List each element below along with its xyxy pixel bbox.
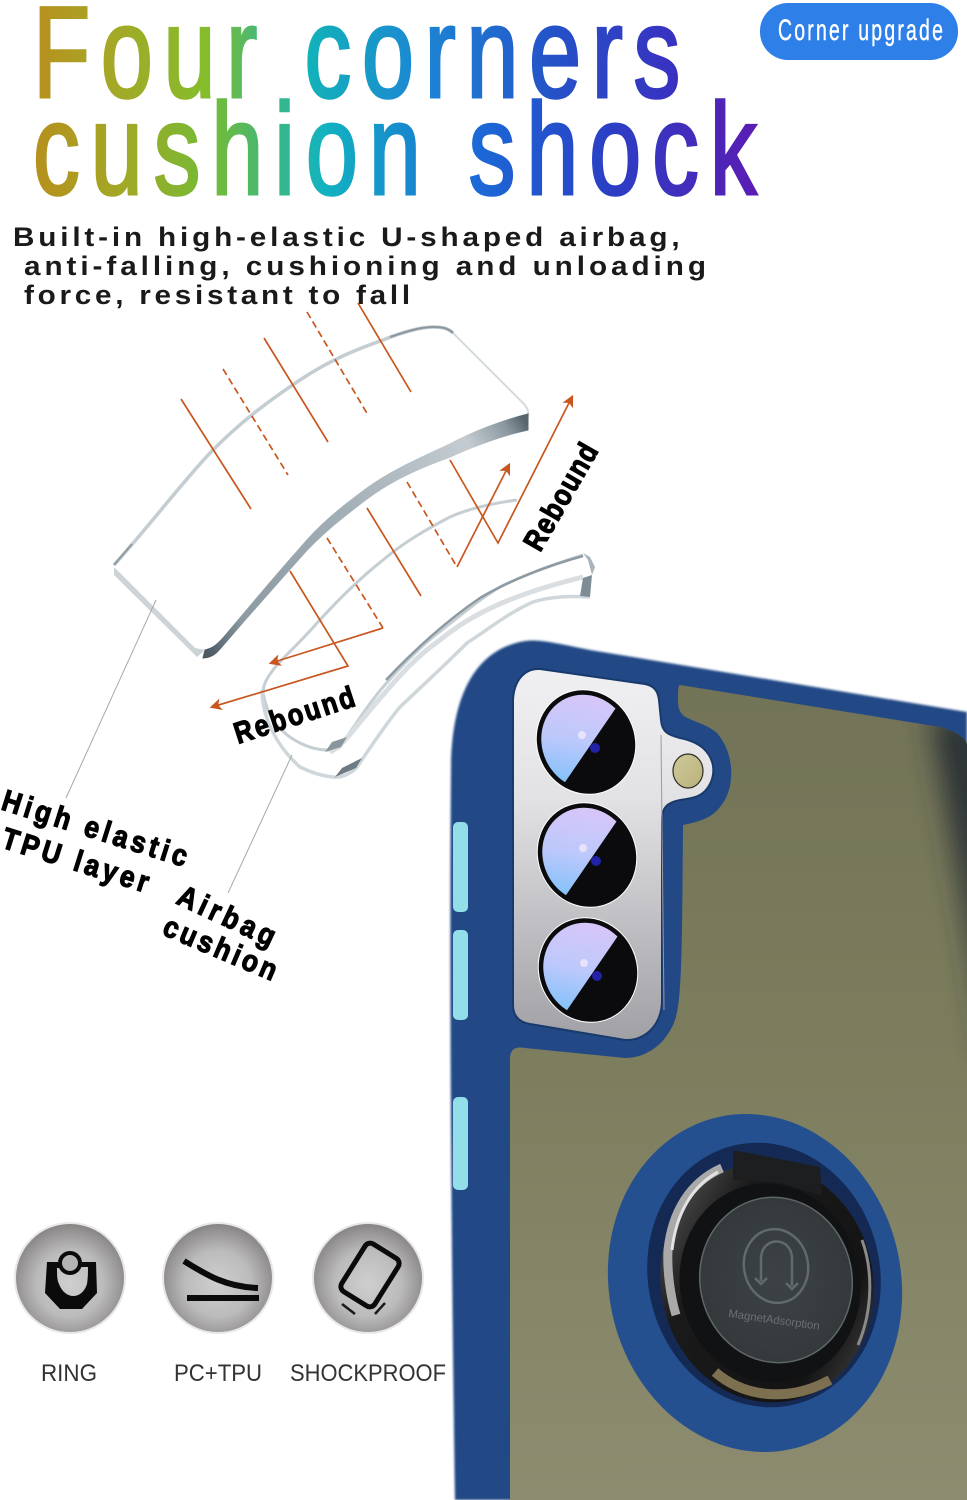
camera lens 1 [536,689,636,795]
airbag cushion U-shaped layer [260,500,595,777]
camera lens 2 [536,802,638,908]
side buttons [453,822,468,1190]
camera lens 3 [538,917,638,1023]
badge: Corner upgrade [760,3,958,60]
icon: PC+TPU [163,1223,273,1333]
caption: RING: RING [41,1360,97,1387]
description text: force, resistant to fall [24,280,410,311]
island seam line [661,735,664,1010]
flash [673,754,703,788]
icon: ring [15,1223,125,1333]
caption: SHOCKPROOF: SHOCKPROOF [290,1360,446,1387]
label: Airbag cushion: Airbag [172,878,282,953]
leader lines [66,600,292,893]
case blue frame [450,641,967,1500]
description text: anti-falling, cushioning and unloading [24,251,706,282]
label: Airbag cushion: cushion [159,909,283,987]
ring holder [577,1086,933,1480]
window right shading [930,715,967,1060]
magnet text: MagnetAdsorption [728,1308,820,1333]
magnetic disc [684,1183,868,1377]
title: Four corners cushion shock [33,0,757,223]
high elastic TPU layer plate [114,327,528,658]
camera island [513,669,713,1040]
description text [13,222,706,311]
label: High elastic TPU layer: TPU layer [0,821,153,899]
label: Rebound (right): Rebound [517,437,605,556]
badge: Corner upgrade: Corner upgrade [778,14,943,47]
caption: PC+TPU: PC+TPU [174,1360,262,1387]
description text: Built-in high-elastic U-shaped airbag, [13,222,680,253]
label: High elastic TPU layer: High elastic [0,783,192,873]
icon: shockproof [313,1223,423,1333]
title: Four corners cushion shock: cushion shock [33,77,757,223]
back window [510,685,967,1500]
phone case [450,641,967,1500]
orange force lines and rebound arrows [181,303,572,707]
magnet icon [738,1224,814,1308]
label: Rebound (lower): Rebound [230,680,359,750]
